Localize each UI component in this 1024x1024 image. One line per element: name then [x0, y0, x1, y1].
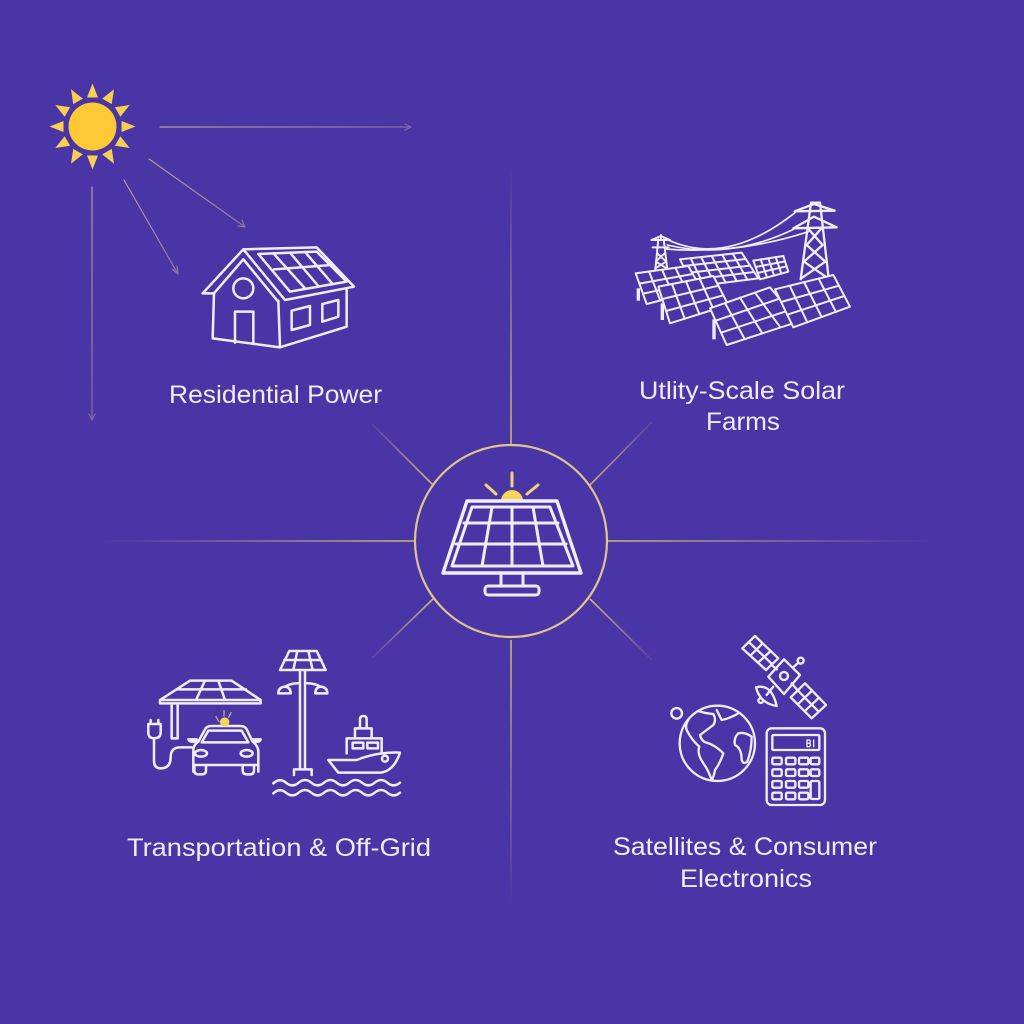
icon: utility-scale solar farm — [636, 203, 850, 345]
panel support legs — [637, 288, 716, 339]
car — [188, 726, 261, 774]
icon: transportation and off-grid — [148, 651, 400, 795]
label: utility-scale solar farms: Utlity-Scale Solar — [639, 377, 845, 405]
label: utility-scale solar farms: Farms — [706, 408, 780, 436]
connector lines from hub — [100, 165, 930, 905]
label: satellites and consumer electronics — [613, 833, 877, 893]
central hub circle — [415, 445, 607, 637]
label: utility-scale solar farms — [639, 377, 845, 436]
sun rising behind panel — [486, 473, 538, 501]
waves — [273, 780, 400, 785]
car roof sun — [216, 711, 231, 727]
transmission wires — [665, 213, 808, 250]
label: residential power: Residential Power — [169, 381, 382, 409]
solar street lamp — [278, 651, 327, 775]
solar array rows — [636, 253, 850, 345]
plug and cable — [148, 720, 192, 768]
label: transportation and off-grid: Transportation & Off-Grid — [127, 834, 431, 862]
boat — [328, 716, 400, 773]
left pylon — [651, 235, 670, 269]
icon: sun — [50, 84, 136, 170]
label: satellites and consumer electronics: Electronics — [680, 865, 812, 893]
calculator — [767, 728, 825, 805]
panel body — [443, 501, 581, 595]
icon: house with rooftop solar — [203, 247, 354, 347]
arrows: sun rays — [89, 124, 411, 420]
right pylon — [793, 203, 837, 279]
satellite — [742, 636, 826, 718]
icon: satellites and consumer electronics — [671, 636, 826, 805]
label: satellites and consumer electronics: Satellites & Consumer — [613, 833, 877, 861]
globe — [680, 706, 755, 781]
icon: central solar panel — [443, 473, 581, 595]
moon — [671, 708, 682, 719]
carport canopy — [160, 681, 261, 738]
